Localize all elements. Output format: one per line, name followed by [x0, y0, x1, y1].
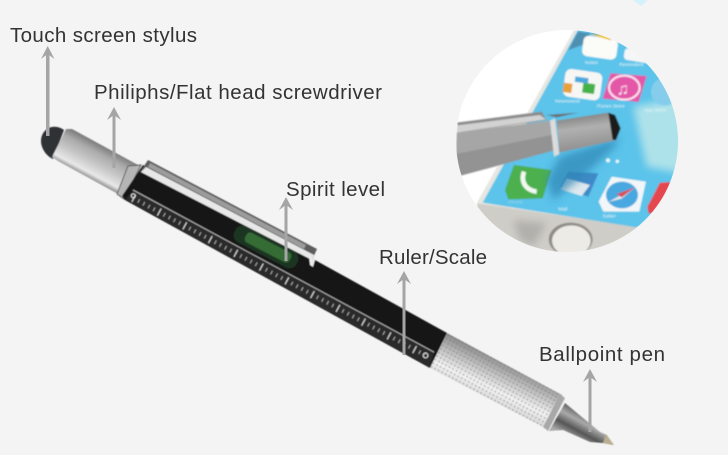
- app labels: Reminders: [619, 62, 644, 68]
- app labels: Mail: [558, 207, 567, 213]
- arrow: spirit level: [279, 197, 293, 261]
- home button: [549, 223, 593, 256]
- app: reminders: [622, 48, 647, 64]
- spirit level window: [231, 223, 301, 271]
- stylus rubber tip: [41, 127, 64, 159]
- app labels: iTunes Store: [597, 103, 625, 109]
- app: app store: [650, 78, 672, 106]
- pen: [41, 127, 614, 445]
- app labels: Phone: [508, 199, 523, 205]
- app: safari: [599, 177, 646, 212]
- pen barrel: [456, 112, 621, 176]
- panel: stylus on phone screen: [456, 30, 693, 260]
- page dots: [606, 158, 619, 163]
- app: itunes store: ♫: [617, 79, 629, 98]
- silver screwdriver cap: [52, 129, 138, 195]
- pocket clip: [140, 160, 317, 267]
- app labels: App Store: [644, 107, 666, 113]
- app: notes: [581, 34, 619, 60]
- screen: [483, 30, 683, 230]
- pen tip collar: [543, 394, 565, 431]
- app: phone: [505, 165, 552, 199]
- label: screwdriver: Philiphs/Flat head screwdriver: [94, 81, 382, 104]
- phone bezel: [477, 30, 578, 214]
- label: spirit level: Spirit level: [286, 178, 385, 201]
- ballpoint: [603, 434, 614, 445]
- black body: [122, 165, 447, 368]
- app: red: [646, 181, 670, 214]
- pen tip cone: [549, 403, 613, 445]
- knurled grip: [430, 333, 562, 428]
- app labels: [508, 60, 666, 219]
- pen shadow: [547, 137, 620, 200]
- label: ruler/scale: Ruler/Scale: [379, 246, 487, 269]
- arrow: ballpoint: [583, 369, 597, 432]
- app: itunes store: [603, 73, 647, 102]
- arrow: screwdriver: [107, 107, 121, 168]
- app labels: Safari: [603, 213, 616, 219]
- app labels: Newsstand: [555, 98, 580, 104]
- label: ballpoint pen: Ballpoint pen: [539, 343, 665, 366]
- ruler strip: [125, 190, 434, 368]
- app labels: Notes: [585, 60, 599, 66]
- fragment: cyan mark at top edge: [633, 0, 648, 6]
- metal collar: [117, 165, 141, 199]
- arrow: ruler: [397, 271, 411, 355]
- app: newsstand: [562, 68, 603, 101]
- label: touch screen stylus: Touch screen stylus: [10, 24, 197, 47]
- home area: [477, 204, 637, 252]
- arrow: touch screen stylus: [41, 46, 54, 136]
- app: mail: [560, 172, 598, 197]
